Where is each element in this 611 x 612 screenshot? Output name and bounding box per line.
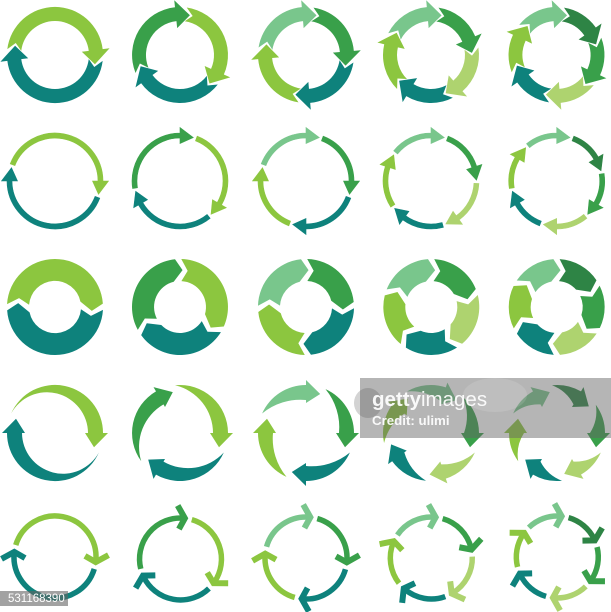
icon: open chevron arrows, two — [1, 514, 109, 600]
icon: thin ring, three arrows — [127, 128, 250, 249]
icon: thin ring, four arrows — [252, 128, 360, 234]
watermark logo: gettyimages — [372, 388, 487, 411]
icon: open chevron arrows, five — [371, 504, 490, 612]
icon: tapered arrows, six — [504, 373, 610, 493]
watermark credit: Credit: ulimi — [372, 413, 450, 428]
icon: donut, three segments — [122, 258, 239, 375]
icon: tapered arrows, three — [112, 380, 233, 503]
icon: donut, five segments — [379, 248, 494, 367]
icon: thin ring, two arrows — [2, 133, 108, 229]
image id tag — [0, 591, 68, 606]
icon: donut, six segments — [501, 250, 611, 364]
icon: thick ring, two arrows — [0, 1, 111, 109]
watermark band — [354, 378, 611, 438]
icon: tapered arrows, two — [2, 385, 108, 481]
icon: thick ring, three arrows — [127, 0, 250, 126]
icon: thick ring, five arrows — [368, 0, 498, 123]
icon: thick ring, four arrows — [250, 0, 362, 111]
icon: open chevron arrows, four — [252, 504, 360, 612]
icon: thin ring, six arrows — [495, 128, 611, 234]
icon: tapered arrows, four — [253, 380, 359, 486]
icon: thick ring, six arrows — [492, 0, 611, 115]
icon: open chevron arrows, three — [132, 505, 247, 612]
icon: tapered arrows, five — [367, 372, 484, 493]
icon: open chevron arrows, six — [497, 503, 611, 611]
icon: thin ring, five arrows — [369, 128, 493, 246]
icon: donut, four segments — [249, 250, 363, 364]
icon: donut, two segments — [0, 250, 110, 364]
image id tag: 531168390 — [8, 593, 65, 605]
